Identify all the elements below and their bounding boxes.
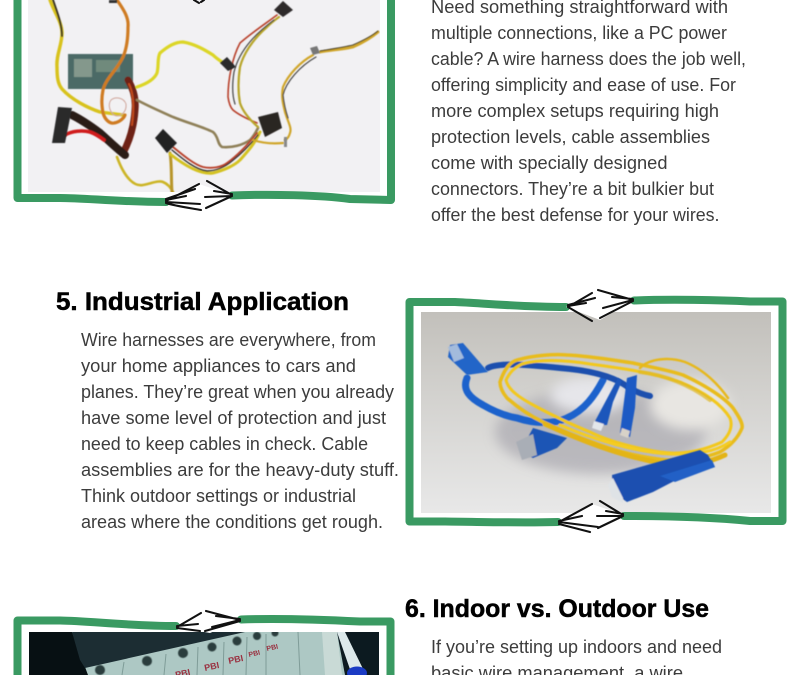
heading: 5. Industrial Application: 5. Industrial Application <box>56 288 349 316</box>
icon: scribble arrow top <box>566 290 634 321</box>
text block: industrial application paragraph <box>81 330 399 532</box>
photo: patch panel rack: PBI <box>227 653 244 666</box>
text block: industrial application paragraph: assemblies are for the heavy-duty stuff. <box>81 460 399 480</box>
text block: industrial application paragraph: need to keep cables in check. Cable <box>81 434 368 454</box>
icon: top scribble fragment <box>194 0 204 3</box>
text block: industrial application paragraph: areas where the conditions get rough. <box>81 512 383 532</box>
frame: green border with black cable ties <box>410 290 782 532</box>
text block: indoor vs outdoor paragraph: If you’re setting up indoors and need <box>431 637 722 657</box>
text block: connections paragraph <box>431 0 746 225</box>
text block: connections paragraph: offer the best defense for your wires. <box>431 205 720 225</box>
frame: green border with black cable ties <box>18 0 391 210</box>
photo: patch panel rack: PBI <box>203 660 220 673</box>
text block: industrial application paragraph: planes. They’re great when you already <box>81 382 394 402</box>
text block: connections paragraph: connectors. They’re a bit bulkier but <box>431 179 714 199</box>
panel: network cables photo frame <box>410 290 782 532</box>
photo: PC power wire harness <box>28 0 380 192</box>
photo: patch panel rack: PBI <box>248 650 261 659</box>
photo: patch panel rack <box>29 630 379 675</box>
text block: connections paragraph: come with specially designed <box>431 153 668 173</box>
heading: 6. Indoor vs. Outdoor Use: 6. Indoor vs. Outdoor Use <box>405 595 709 623</box>
text block: industrial application paragraph: have some level of protection and just <box>81 408 386 428</box>
text block: connections paragraph: protection levels, cable assemblies <box>431 127 710 147</box>
photo: blue and yellow cables <box>421 312 771 513</box>
icon: scribble arrow bottom <box>558 501 624 532</box>
icon: scribble arrow <box>176 611 241 633</box>
text block: connections paragraph: offering simplicity and ease of use. For <box>431 75 736 95</box>
text block: connections paragraph: multiple connections, like a PC power <box>431 23 727 43</box>
icon: scribble arrows <box>166 181 232 210</box>
text block: industrial application paragraph: Wire harnesses are everywhere, from <box>81 330 376 350</box>
text block: connections paragraph: cable? A wire harness does the job well, <box>431 49 746 69</box>
text block: industrial application paragraph: your home appliances to cars and <box>81 356 356 376</box>
text block: industrial application paragraph: Think outdoor settings or industrial <box>81 486 356 506</box>
photo: patch panel rack: PBI <box>266 644 279 653</box>
panel: wire harness photo frame <box>18 0 391 210</box>
text block: connections paragraph: more complex setups requiring high <box>431 101 719 121</box>
frame: green border with black cable tie <box>18 611 390 675</box>
panel: indoor equipment photo frame <box>18 611 390 675</box>
text block: indoor vs outdoor paragraph <box>431 637 722 675</box>
